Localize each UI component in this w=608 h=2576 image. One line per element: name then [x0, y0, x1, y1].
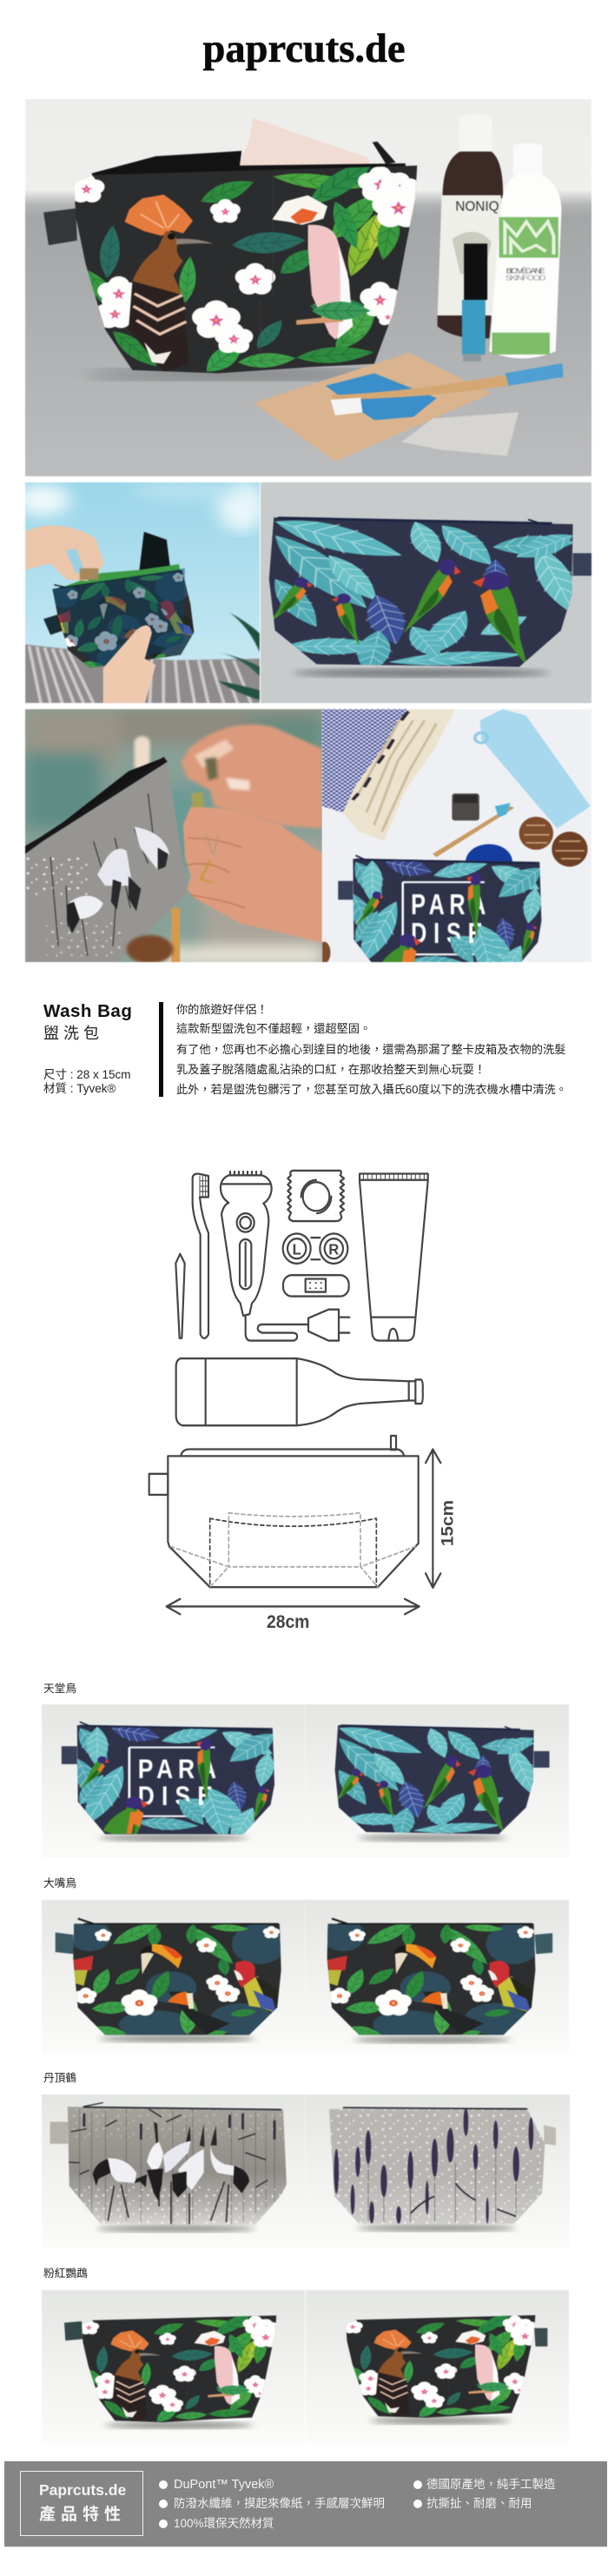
icon: condom packet [287, 1171, 344, 1221]
arrow: height 15cm: 15cm [439, 1500, 457, 1546]
size: 尺寸 : 28 x 15cm [43, 1068, 131, 1081]
photo: paradise front [42, 1703, 305, 1843]
green lining [63, 564, 180, 589]
brown bottle: NONIQ [455, 198, 499, 214]
photo: toucan back [305, 1900, 570, 2045]
icon: bandage [283, 1275, 349, 1297]
icon: contact lens case: R [328, 1240, 340, 1258]
photo: paradise back [305, 1703, 570, 1843]
icon: plug [308, 1310, 349, 1341]
blanket [322, 709, 455, 841]
hands [25, 526, 155, 703]
features heading: 產品特性 [39, 2506, 126, 2524]
diagram: what fits inside and bag dimensions [148, 1170, 457, 1632]
arrow: width 28cm [167, 1599, 420, 1632]
subheading: 盥洗包 [43, 1025, 103, 1042]
lip gloss [462, 243, 487, 362]
photo: hoopoe back [306, 2289, 570, 2427]
feature: DuPont Tyvek: DuPont™ Tyvek® [174, 2478, 274, 2492]
photo: flat lay with paradise bag [321, 708, 591, 963]
white bottle: BIO:VÉGANE [506, 267, 545, 275]
panel: product features band [4, 2461, 607, 2547]
photo: paradise bag back on grey [261, 481, 592, 704]
panel: product name and specs [43, 1001, 132, 1095]
heading: Wash Bag: Wash Bag [43, 1001, 132, 1021]
feature: made in Germany: 德國原產地，純手工製造 [426, 2478, 556, 2491]
arrow: width 28cm: 28cm [267, 1612, 309, 1632]
description text: 你的旅遊好伴侶！ [176, 1003, 268, 1016]
features title box [20, 2471, 143, 2536]
icon: contact lens case: L [293, 1240, 301, 1258]
material: 材質 : Tyvek® [43, 1082, 116, 1095]
icon: cream tube [360, 1174, 428, 1341]
label: toucan: 大嘴鳥 [43, 1877, 76, 1889]
photo: toucan bag held against the sky [24, 481, 261, 704]
upper hand [182, 725, 322, 828]
crane pouch tilted [25, 757, 188, 962]
description text: 乳及蓋子脫落隨處亂沾染的口紅，在那收拾整天到無心玩耍！ [176, 1063, 486, 1076]
kraft pouch [254, 353, 492, 461]
description text: 此外，若是盥洗包髒污了，您甚至可放入攝氏60度以下的洗衣機水槽中清洗。 [176, 1083, 567, 1096]
description text: 這款新型盥洗包不僅超輕，還超堅固。 [176, 1022, 371, 1035]
description text [176, 1003, 567, 1096]
white bottle: SKINFOOD [506, 275, 545, 282]
photo: crane front [42, 2095, 305, 2234]
label: paradise: 天堂鳥 [43, 1683, 76, 1695]
icon: tweezers [175, 1254, 185, 1338]
lower hand with rings [183, 792, 322, 943]
bag tag [43, 209, 77, 245]
blue sponge [466, 844, 512, 880]
toothbrush [433, 803, 514, 857]
icon: contact lens case [283, 1233, 347, 1264]
sunglasses [139, 532, 170, 570]
bag tag [43, 614, 64, 635]
photo: hoopoe front [42, 2289, 306, 2430]
icon: toothbrush [193, 1174, 208, 1338]
title: paprcuts.de [203, 27, 405, 71]
paradise bag [338, 853, 550, 1005]
hoopoe bag [68, 153, 425, 378]
reed pattern bag [327, 2108, 549, 2225]
zipper [91, 142, 406, 177]
sachet [401, 412, 519, 456]
bamboo toothbrush [331, 363, 564, 415]
feature: eco: 100%環保天然材質 [174, 2517, 274, 2530]
photo: toucan front [42, 1900, 305, 2044]
white bottle [489, 143, 561, 358]
feature: durable: 抗撕扯、耐磨、耐用 [426, 2497, 532, 2510]
icon: bottle [176, 1358, 423, 1425]
brand name: Paprcuts.de [39, 2481, 126, 2499]
wooden deck [25, 644, 260, 703]
wooden peg [127, 908, 180, 964]
photo: crane bag with hands [24, 708, 323, 963]
water bottle [475, 709, 591, 828]
palm leaves [218, 613, 260, 700]
blurred toothbrush [135, 736, 150, 771]
feature: splash-proof: 防潑水纖維，摸起來像紙，手感層次鮮明 [174, 2497, 385, 2510]
arrow: height 15cm [426, 1449, 457, 1588]
description text: 有了他，您再也不必擔心到達目的地後，還需為那漏了整卡皮箱及衣物的洗髮 [176, 1043, 565, 1056]
photo: hoopoe bag with toiletries [24, 99, 592, 476]
photo: crane back with reeds [305, 2095, 570, 2234]
pine cones [519, 817, 588, 866]
vertical divider bar [159, 1002, 163, 1097]
small toucan bag [48, 565, 205, 674]
pink cloth [239, 118, 370, 167]
jar [452, 793, 479, 820]
brown bottle [438, 115, 503, 339]
icon: electric shaver [221, 1172, 308, 1341]
label: crane: 丹頂鶴 [43, 2072, 76, 2084]
label: cockatoo: 粉紅鸚鵡 [43, 2267, 88, 2280]
bag outline [149, 1436, 419, 1587]
